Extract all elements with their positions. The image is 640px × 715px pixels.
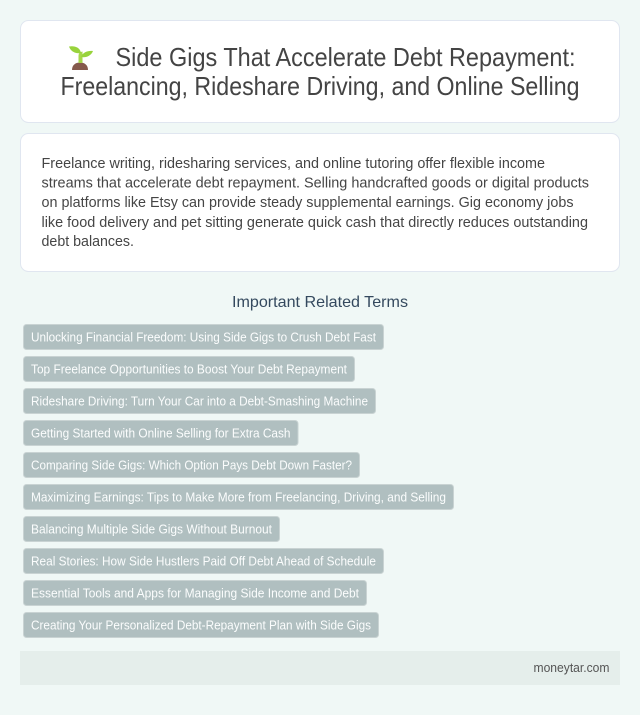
heading: title — [60, 44, 580, 101]
chip: term 8 — [24, 548, 384, 574]
text block: description: on platforms like Etsy can provide steady supplemental earnings. Gig economy jobs — [42, 195, 574, 211]
text block: description: streams that accelerate debt repayment. Selling handcrafted goods or digital products — [42, 176, 589, 192]
chip: term 2 — [24, 356, 354, 382]
heading: title: Side Gigs That Accelerate Debt Repayment: — [116, 44, 576, 72]
heading: related terms: Important Related Terms — [232, 294, 408, 311]
chip: term 8: Real Stories: How Side Hustlers Paid Off Debt Ahead of Schedule — [31, 554, 376, 568]
chip: term 3: Rideshare Driving: Turn Your Car into a Debt-Smashing Machine — [31, 394, 368, 408]
chip: term 5 — [24, 452, 360, 478]
list: related term chips — [24, 324, 454, 638]
text block: description — [42, 156, 589, 250]
chip: term 6 — [24, 484, 454, 510]
chip: term 4: Getting Started with Online Selling for Extra Cash — [31, 426, 290, 440]
text block: description: debt balances. — [42, 234, 134, 250]
chip: term 7 — [24, 516, 280, 542]
chip: term 5: Comparing Side Gigs: Which Option Pays Debt Down Faster? — [31, 458, 352, 472]
footer bar — [20, 651, 620, 685]
icon: seedling — [69, 46, 93, 70]
text: site credit: moneytar.com — [534, 660, 610, 675]
panel: description card — [20, 134, 620, 272]
chip: term 4 — [24, 420, 298, 446]
chip: term 9 — [24, 580, 366, 606]
chip: term 3 — [24, 388, 376, 414]
chip: term 7: Balancing Multiple Side Gigs Without Burnout — [31, 522, 272, 536]
chip: term 6: Maximizing Earnings: Tips to Make More from Freelancing, Driving, and Selling — [31, 490, 446, 504]
chip: term 1: Unlocking Financial Freedom: Using Side Gigs to Crush Debt Fast — [31, 330, 376, 344]
chip: term 10 — [24, 612, 378, 638]
chip: term 2: Top Freelance Opportunities to Boost Your Debt Repayment — [31, 362, 347, 376]
heading: title: Freelancing, Rideshare Driving, and Online Selling — [60, 73, 580, 101]
text block: description: like food delivery and pet sitting generate quick cash that directly reduces outstanding — [42, 215, 588, 231]
chip: term 10: Creating Your Personalized Debt-Repayment Plan with Side Gigs — [31, 618, 371, 632]
chip: term 1 — [24, 324, 384, 350]
chip: term 9: Essential Tools and Apps for Managing Side Income and Debt — [31, 586, 359, 600]
text block: description: Freelance writing, ridesharing services, and online tutoring offer flexible income — [42, 156, 545, 172]
panel: title card — [20, 20, 620, 122]
